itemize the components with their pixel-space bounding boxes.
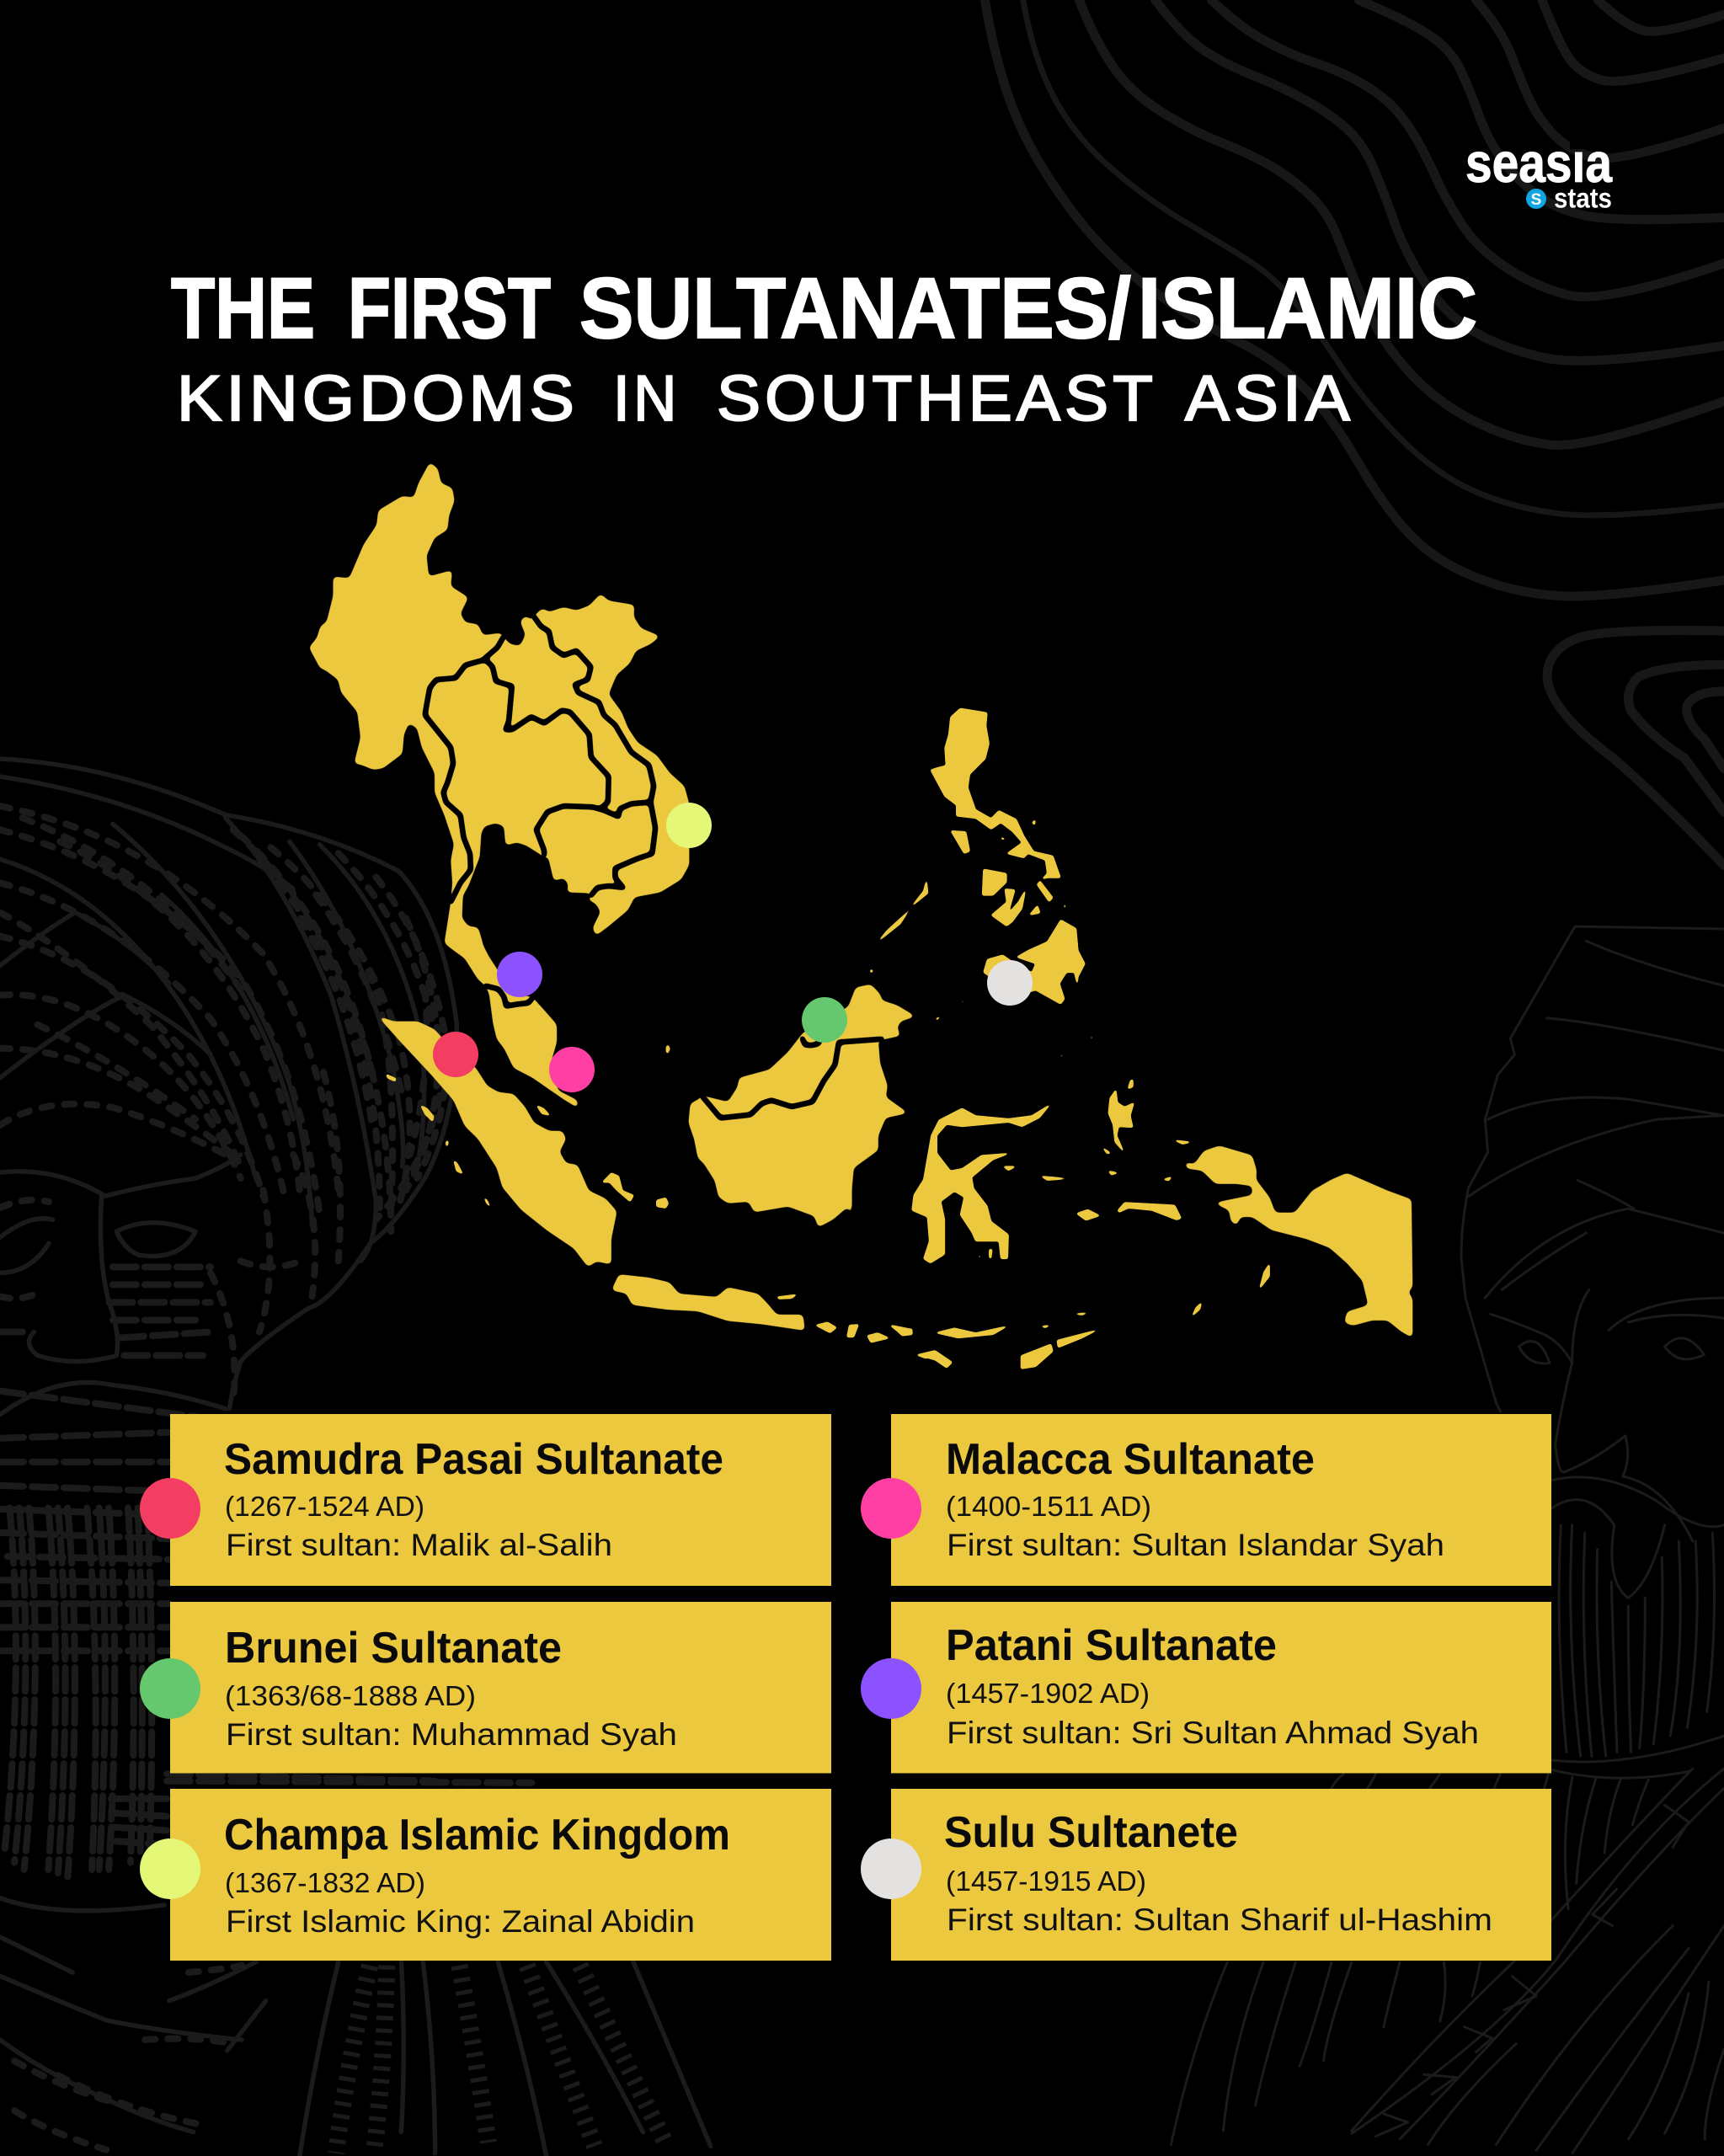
subtitle: KINGDOMS bbox=[177, 363, 579, 435]
legend dot: green bbox=[140, 1658, 200, 1719]
marker: Sulu bbox=[987, 960, 1033, 1006]
legend dot: grey bbox=[861, 1838, 921, 1899]
name: Samudra Pasai Sultanate bbox=[224, 1435, 723, 1484]
name: Sulu Sultanete bbox=[944, 1808, 1238, 1857]
marker: Brunei bbox=[802, 997, 847, 1043]
dates: (1400-1511 AD) bbox=[946, 1491, 1151, 1522]
first ruler: First sultan: Sultan Islandar Syah bbox=[947, 1528, 1444, 1562]
panel: Patani Sultanate bbox=[861, 1602, 1551, 1774]
subtitle: SOUTHEAST bbox=[717, 363, 1157, 435]
name: Patani Sultanate bbox=[946, 1621, 1277, 1670]
icon: blue S badge: S bbox=[1531, 191, 1541, 209]
map land: Philippines, Sulawesi and small islands bbox=[386, 708, 1269, 1369]
logo: seasia stats bbox=[1465, 131, 1613, 214]
map: Southeast Asia bbox=[309, 462, 1412, 1369]
logo: seasia stats: seasia bbox=[1465, 131, 1613, 194]
legend dot: purple bbox=[861, 1658, 921, 1719]
panel: Champa Islamic Kingdom bbox=[140, 1789, 831, 1961]
marker: Malacca bbox=[549, 1047, 595, 1092]
dates: (1457-1915 AD) bbox=[946, 1865, 1146, 1897]
dates: (1363/68-1888 AD) bbox=[225, 1680, 476, 1711]
first ruler: First sultan: Muhammad Syah bbox=[226, 1717, 677, 1752]
subtitle: IN bbox=[613, 363, 681, 435]
dates: (1367-1832 AD) bbox=[225, 1867, 425, 1898]
marker: Champa bbox=[666, 803, 712, 848]
dates: (1457-1902 AD) bbox=[946, 1678, 1150, 1709]
name: Malacca Sultanate bbox=[946, 1435, 1315, 1484]
title: THE bbox=[171, 260, 315, 356]
title bbox=[171, 260, 1477, 356]
marker: Patani bbox=[497, 952, 542, 997]
background: line-art portrait right bbox=[1172, 926, 1724, 2153]
title: SULTANATES/ bbox=[579, 260, 1131, 356]
title: FIRST bbox=[348, 260, 551, 356]
first ruler: First sultan: Malik al-Salih bbox=[226, 1528, 612, 1562]
background: topographic contour lines bbox=[985, 0, 1724, 865]
name: Brunei Sultanate bbox=[225, 1624, 562, 1673]
name: Champa Islamic Kingdom bbox=[224, 1811, 730, 1860]
logo: seasia stats: stats bbox=[1554, 182, 1612, 214]
title: ISLAMIC bbox=[1138, 260, 1477, 356]
first ruler: First sultan: Sri Sultan Ahmad Syah bbox=[947, 1716, 1479, 1750]
panel: Samudra Pasai Sultanate bbox=[140, 1414, 831, 1586]
marker: Samudra Pasai bbox=[433, 1032, 478, 1077]
panel: Sulu Sultanete bbox=[861, 1789, 1551, 1961]
first ruler: First Islamic King: Zainal Abidin bbox=[226, 1904, 695, 1939]
icon: blue S badge bbox=[1526, 189, 1546, 209]
subtitle: ASIA bbox=[1185, 363, 1354, 435]
legend dot: red bbox=[140, 1478, 200, 1539]
map land: large landmasses bbox=[309, 462, 1412, 1338]
dates: (1267-1524 AD) bbox=[225, 1491, 424, 1522]
background: engraved portrait left bbox=[0, 759, 711, 2156]
map borders: country boundaries bbox=[425, 615, 882, 1118]
panel: Brunei Sultanate bbox=[140, 1602, 831, 1774]
panel: Malacca Sultanate bbox=[861, 1414, 1551, 1586]
subtitle bbox=[177, 363, 1354, 435]
first ruler: First sultan: Sultan Sharif ul-Hashim bbox=[947, 1903, 1492, 1937]
legend dot: pink bbox=[861, 1478, 921, 1539]
legend dot: lime bbox=[140, 1838, 200, 1899]
